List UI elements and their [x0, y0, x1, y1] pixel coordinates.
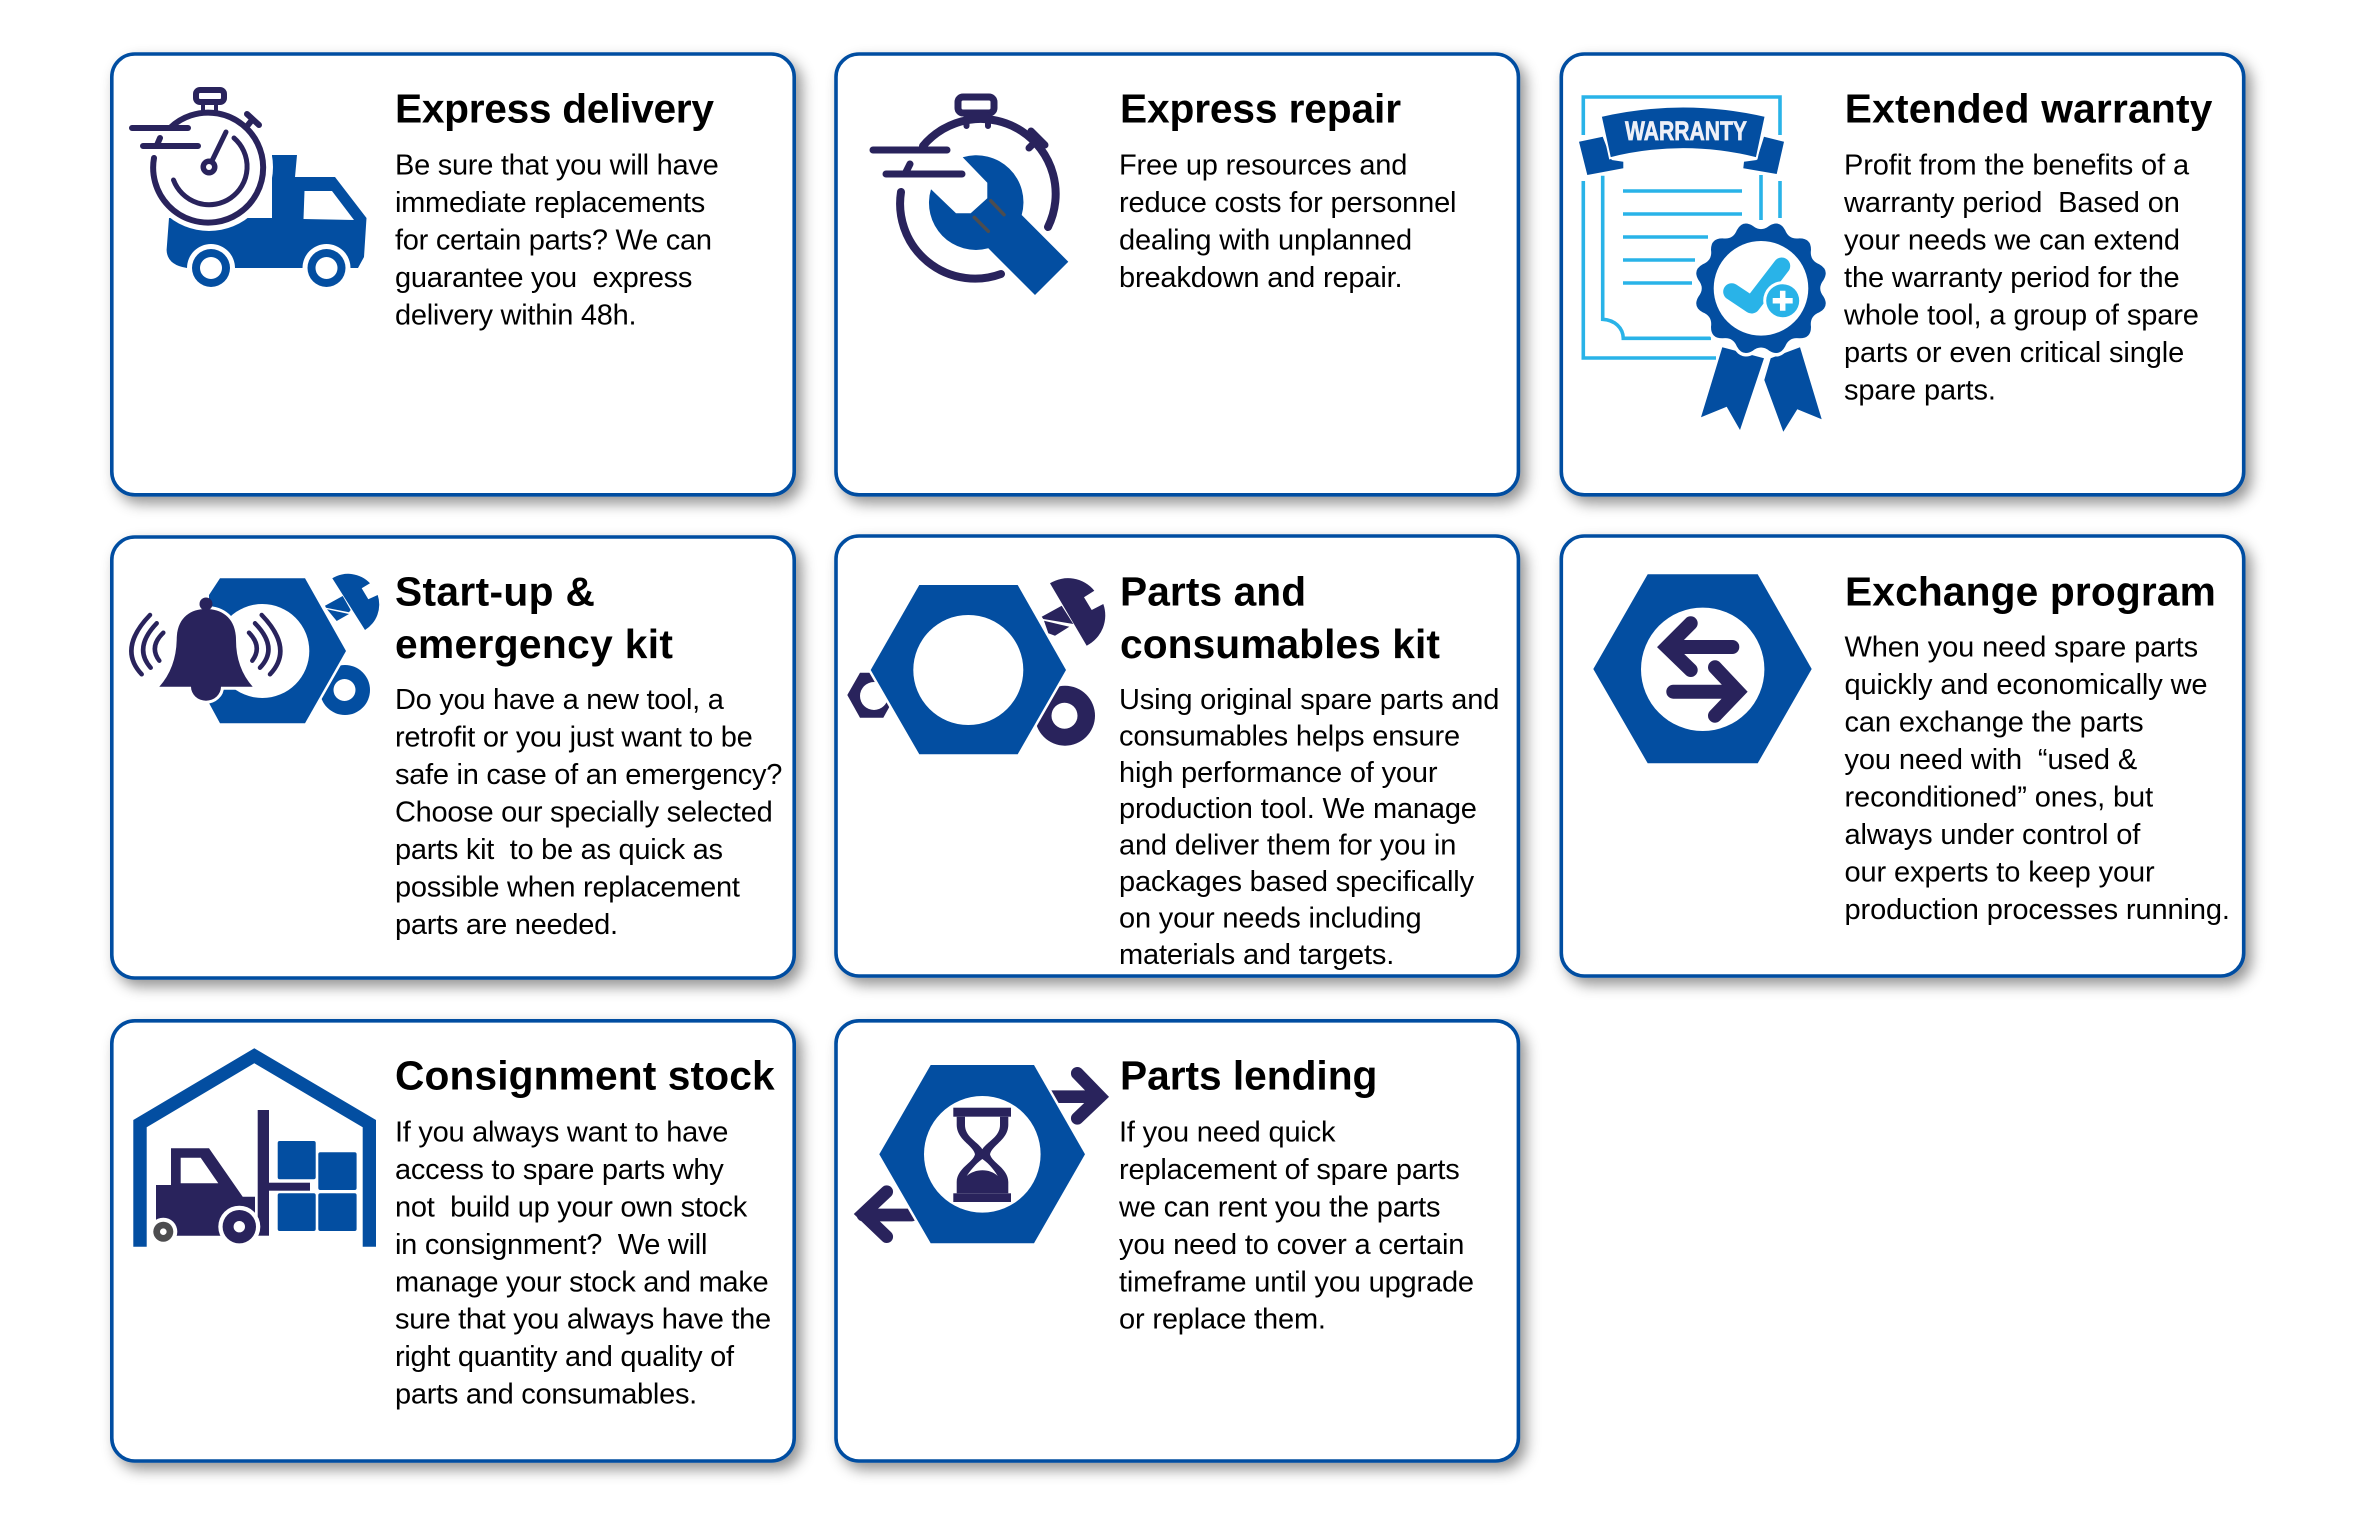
body text: breakdown and repair. [1119, 262, 1402, 294]
body text: you need with “used & [1844, 744, 2137, 776]
heading: Express repair [1120, 85, 1401, 131]
banner label: WARRANTY [1625, 116, 1747, 146]
body text: delivery within 48h. [395, 299, 636, 331]
body text: timeframe until you upgrade [1119, 1266, 1474, 1298]
body text: sure that you always have the [395, 1304, 771, 1336]
panel: extended warranty [1561, 54, 2244, 495]
icon: hourglass in hex nut with arrows [863, 1065, 1100, 1243]
body text: reconditioned” ones, but [1844, 782, 2153, 814]
body text: or replace them. [1119, 1304, 1326, 1336]
heading: Exchange program [1845, 568, 2216, 614]
body text: immediate replacements [395, 187, 705, 219]
body text: and deliver them for you in [1119, 830, 1456, 862]
icon: warranty certificate [1579, 97, 1826, 432]
body text: dealing with unplanned [1119, 224, 1412, 256]
panel: start-up and emergency kit [112, 537, 794, 978]
heading: Express delivery [395, 85, 714, 131]
heading: Consignment stock [395, 1052, 775, 1098]
body text: production tool. We manage [1119, 793, 1477, 825]
card background [112, 1021, 794, 1461]
body text: we can rent you the parts [1118, 1192, 1440, 1224]
body text: for certain parts? We can [395, 224, 712, 256]
body text: our experts to keep your [1844, 857, 2155, 889]
body text: If you always want to have [395, 1117, 728, 1149]
body text: whole tool, a group of spare [1843, 299, 2199, 331]
body text: Using original spare parts and [1119, 684, 1499, 716]
body text: Free up resources and [1119, 149, 1407, 181]
body text: reduce costs for personnel [1119, 187, 1456, 219]
card background [1561, 54, 2244, 495]
body text: on your needs including [1119, 902, 1421, 934]
body text: If you need quick [1119, 1117, 1336, 1149]
card background [112, 537, 794, 978]
body text: not build up your own stock [395, 1192, 748, 1224]
panel: parts and consumables kit [836, 536, 1518, 976]
heading: Start-up & [395, 568, 595, 614]
icon: stopwatch and truck [132, 90, 366, 292]
panel: express repair [836, 54, 1518, 495]
heading: emergency kit [395, 621, 673, 667]
body text: retrofit or you just want to be [395, 722, 753, 754]
card background [836, 54, 1518, 495]
heading: consumables kit [1120, 621, 1440, 667]
body text: possible when replacement [395, 872, 740, 904]
card background [1561, 536, 2244, 976]
heading: Parts and [1120, 568, 1306, 614]
body text: right quantity and quality of [395, 1341, 735, 1373]
panel: express delivery [112, 54, 794, 495]
body text: in consignment? We will [395, 1229, 707, 1261]
heading: Extended warranty [1845, 85, 2213, 131]
body text: replacement of spare parts [1119, 1154, 1460, 1186]
body text: When you need spare parts [1844, 632, 2198, 664]
body text: parts and consumables. [395, 1378, 697, 1410]
body text: parts kit to be as quick as [395, 834, 723, 866]
body text: can exchange the parts [1844, 707, 2144, 739]
body text: production processes running. [1844, 894, 2230, 926]
heading: Parts lending [1120, 1052, 1377, 1098]
body text: manage your stock and make [395, 1266, 768, 1298]
icon: stopwatch and wrench [873, 97, 1068, 295]
body text: Profit from the benefits of a [1844, 149, 2190, 181]
body text: quickly and economically we [1844, 669, 2207, 701]
icon: bell and hex nut [131, 574, 379, 723]
panel: consignment stock [112, 1021, 794, 1461]
body text: guarantee you express [395, 262, 692, 294]
rosette [1696, 224, 1826, 353]
icon: warehouse and forklift [133, 1048, 376, 1248]
body text: packages based specifically [1119, 866, 1475, 898]
body text: your needs we can extend [1844, 224, 2180, 256]
card background [836, 1021, 1518, 1461]
body text: high performance of your [1119, 757, 1438, 789]
body text: Be sure that you will have [395, 149, 718, 181]
icon: hex nut, screw and washers [847, 578, 1105, 754]
body text: parts are needed. [395, 909, 618, 941]
body text: Do you have a new tool, a [395, 684, 725, 716]
body text: spare parts. [1844, 374, 1996, 406]
panel: parts lending [836, 1021, 1518, 1461]
icon: exchange arrows in hex nut [1593, 574, 1812, 763]
body text: materials and targets. [1119, 939, 1394, 971]
body text: warranty period Based on [1843, 187, 2180, 219]
body text: access to spare parts why [395, 1154, 724, 1186]
card background [836, 536, 1518, 976]
panel: exchange program [1561, 536, 2244, 976]
body text: the warranty period for the [1844, 262, 2180, 294]
body text: always under control of [1844, 819, 2141, 851]
card background [112, 54, 794, 495]
body text: Choose our specially selected [395, 797, 772, 829]
body text: parts or even critical single [1844, 337, 2184, 369]
body text: safe in case of an emergency? [395, 759, 782, 791]
body text: you need to cover a certain [1119, 1229, 1464, 1261]
body text: consumables helps ensure [1119, 720, 1460, 752]
